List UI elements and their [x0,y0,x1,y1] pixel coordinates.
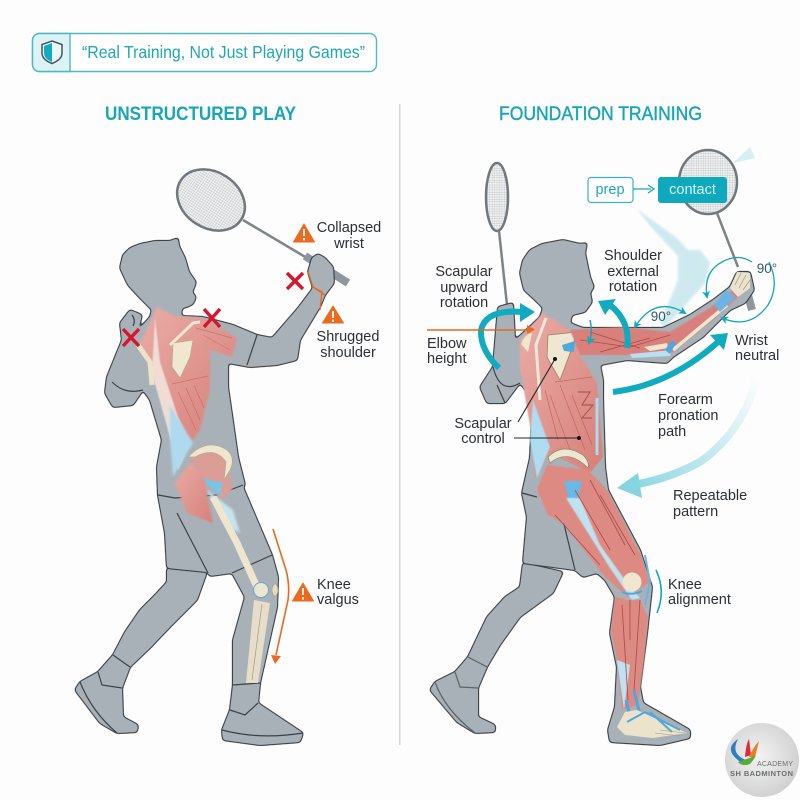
arrow: scapular upward rotation [481,303,535,368]
label: repeatable pattern [673,488,747,520]
x mark: wrist [287,273,303,289]
glute and femur [175,445,278,683]
label: scapular upward rotation: Scapular [435,264,493,280]
logo: academy badminton: ACADEMY [757,761,793,768]
warning: knee valgus [292,577,359,608]
label: repeatable pattern: pattern [673,504,718,520]
warning: shrugged shoulder [317,306,379,361]
label: shoulder external rotation [604,248,662,295]
label: shoulder external rotation: Shoulder [604,248,662,264]
label: elbow height: height [427,351,467,367]
racket: contact hand [679,147,755,310]
label: scapular control with leaders: Scapular [454,416,512,432]
label: scapular control with leaders [454,357,581,447]
body silhouette [480,240,754,745]
arc: upper arm rotation [589,320,591,343]
logo: academy badminton [725,723,799,797]
warning: shrugged shoulder: shoulder [320,345,376,361]
warning: collapsed wrist: Collapsed [317,220,381,236]
label: elbow height: Elbow [427,336,467,352]
logo: academy badminton: SH BADMINTON [730,769,793,778]
wrist strain marks [308,272,325,310]
label: knee alignment: alignment [668,592,731,608]
body silhouette [105,238,334,745]
label: forearm pronation path [658,392,718,440]
label: forearm pronation path: Forearm [658,392,713,408]
figure: foundation training player [430,147,755,745]
sequence: prep to contact: prep [595,182,625,198]
label: shoulder external rotation: rotation [609,279,657,295]
arc: knee alignment [656,570,661,613]
label: forearm pronation path: pronation [658,408,718,424]
warning: collapsed wrist: wrist [333,236,364,252]
label: wrist neutral: Wrist [735,333,768,349]
torso muscles [520,313,603,478]
label: wrist neutral [735,333,779,364]
badge: slogan [32,34,376,72]
label: elbow height [427,336,467,367]
back leg [430,563,563,733]
label: forearm pronation path: path [658,424,686,440]
back leg [75,568,207,733]
warning: collapsed wrist [294,220,381,252]
angle: elbow 90 degrees [635,307,685,327]
badge: slogan: “Real Training, Not Just Playing Games” [82,42,365,62]
label: shoulder external rotation: external [607,264,659,280]
figure: unstructured play player [75,157,348,745]
arrow: knee valgus path [271,529,289,664]
arrow: elbow height line [427,325,535,334]
label: knee alignment: Knee [668,577,702,593]
label: scapular upward rotation: upward [440,280,488,296]
angle: wrist 90 degrees [706,258,777,322]
label: scapular upward rotation: rotation [440,295,488,311]
warning: knee valgus: valgus [317,592,359,608]
ghost arm: prep position [637,209,710,328]
heading: unstructured play: UNSTRUCTURED PLAY [105,104,296,125]
racket: left figure [166,157,348,283]
label: scapular upward rotation [435,264,493,311]
sequence: prep to contact [588,177,727,203]
arrow: shoulder external rotation [598,299,628,348]
label: knee alignment [668,577,731,608]
thigh and glute muscles [537,449,650,605]
warning: shrugged shoulder: Shrugged [317,329,379,345]
racket: raised back hand [486,163,508,305]
angle: wrist 90 degrees: 90° [757,261,777,276]
warning: knee valgus: Knee [317,577,351,593]
x mark: neck side [123,329,139,346]
arrow: repeatable pattern [617,375,757,498]
angle: elbow 90 degrees: 90° [651,309,671,324]
lower leg and foot [611,597,687,738]
x mark: shoulder [204,309,220,327]
arm muscles [562,272,750,358]
heading: foundation training: FOUNDATION TRAINING [499,104,702,125]
label: repeatable pattern: Repeatable [673,488,747,504]
label: scapular control with leaders: control [461,431,505,447]
back muscles [138,307,237,477]
label: wrist neutral: neutral [735,348,779,364]
sequence: prep to contact: contact [669,182,716,198]
arrow: forearm pronation [613,333,728,392]
